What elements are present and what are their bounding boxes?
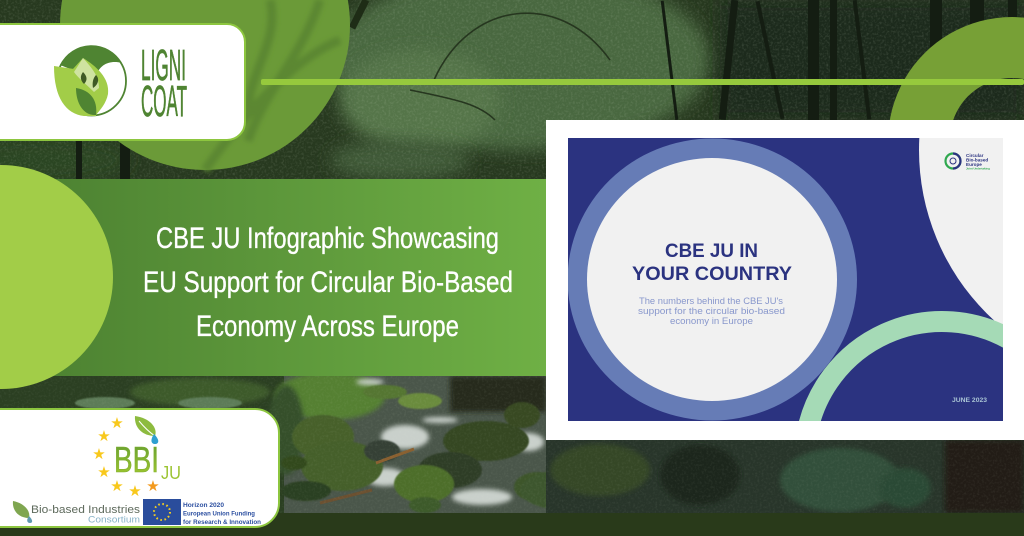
panel: green title banner [0,179,546,376]
icon: EU flag [143,499,181,525]
cover date: JUNE 2023 [952,397,987,404]
cover subtitle: support for the circular bio-based [638,306,785,316]
horizontal accent line [261,79,1024,85]
icon: EU stars ring: ★ [110,478,124,495]
consortium name [31,504,141,526]
large green circle top left [60,0,350,170]
JU wordmark: JU [161,463,181,483]
icon: EU stars ring: ★ [97,464,111,481]
decorative light green circle [0,165,113,389]
icon: Circular Bio-based Europe logo: Joint Undertaking [966,166,990,170]
panel: report cover card [546,120,1024,440]
icon: Circular Bio-based Europe logo: Circular [966,153,984,158]
icon: EU stars ring: ★ [128,483,142,500]
title: CBE JU Infographic Showcasing [156,222,499,255]
report cover slide [568,138,1003,421]
cover subtitle [638,296,785,326]
icon: EU stars ring: ★ [110,415,124,432]
icon: EU stars ring: ★ [146,478,160,495]
bottom dark strip [0,513,1024,536]
icon: EU stars ring: ★ [92,446,106,463]
icon: consortium leaf [13,501,32,523]
Horizon 2020 funding text [183,502,261,526]
icon: Circular Bio-based Europe logo: Europe [966,162,982,167]
panel: Lignicoat logo: COAT [141,77,187,126]
background photo: river and rocks [0,372,1024,513]
panel: BBI JU logos [0,409,279,527]
title [143,222,513,343]
cover heading [632,240,792,285]
icon: EU stars ring: ★ [97,428,111,445]
icon: Circular Bio-based Europe logo: Bio-based [966,158,988,162]
logo wordmark [141,41,187,126]
consortium name: Consortium [88,514,140,526]
cover heading: CBE JU IN [665,240,758,262]
Horizon 2020 funding text: Horizon 2020 [183,502,224,509]
consortium name: Bio-based Industries [31,504,141,516]
cover subtitle: economy in Europe [670,316,753,326]
cover subtitle: The numbers behind the CBE JU's [639,296,784,306]
icon: leaf with water drop [135,416,158,444]
icon: EU stars ring [92,415,160,500]
cover heading: YOUR COUNTRY [632,263,792,285]
Horizon 2020 funding text: European Union Funding [183,510,255,518]
BBI wordmark: BBI [114,439,159,480]
Horizon 2020 funding text: for Research & Innovation [183,519,261,526]
green ring top right [888,17,1024,265]
title: EU Support for Circular Bio-Based [143,266,513,299]
icon: leaf in circle [54,45,126,116]
panel: Lignicoat logo: LIGNI [141,41,186,90]
background photo: forest canopy [0,0,1024,184]
title: Economy Across Europe [196,310,459,343]
panel: Lignicoat logo [0,24,245,140]
icon: Circular Bio-based Europe logo [946,153,990,170]
